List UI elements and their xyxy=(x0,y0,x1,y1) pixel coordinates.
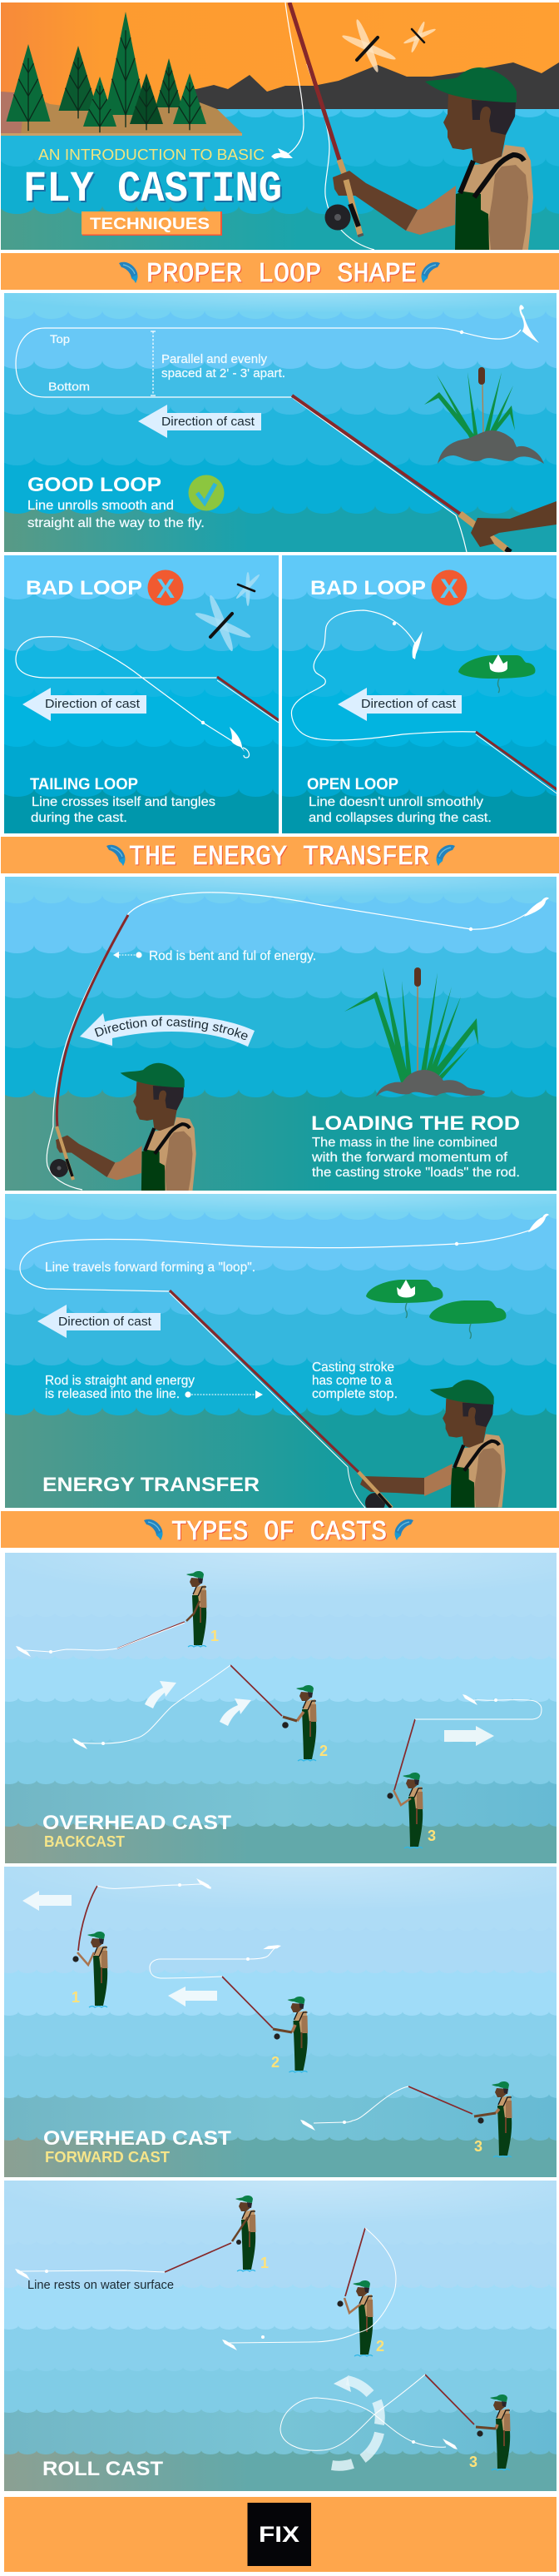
mountains xyxy=(186,62,559,111)
subheading: FORWARD CAST xyxy=(45,2149,170,2166)
casting line loop xyxy=(16,328,521,397)
icon: fish right xyxy=(422,262,440,283)
number 2: 2 xyxy=(319,1743,328,1759)
stop note xyxy=(312,1360,398,1401)
reeds xyxy=(344,967,478,1082)
direction arrow: Direction of cast xyxy=(161,415,255,429)
direction arrow: Direction of cast xyxy=(361,697,457,711)
heading: ENERGY TRANSFER xyxy=(42,1474,260,1496)
heading: BAD LOOP xyxy=(26,577,142,599)
rod xyxy=(217,677,279,723)
dragonfly large xyxy=(341,18,397,73)
arm xyxy=(424,1464,453,1496)
heading: LOADING THE ROD xyxy=(311,1112,520,1135)
direction arrow: Direction of cast xyxy=(45,697,141,711)
fly xyxy=(528,1214,549,1232)
rod note xyxy=(45,1374,195,1401)
fly xyxy=(413,631,423,659)
description xyxy=(311,1136,520,1180)
line dot xyxy=(455,1242,458,1246)
intro line: AN INTRODUCTION TO BASIC xyxy=(38,147,265,163)
fishing lines xyxy=(285,2,374,250)
lily pad with flower xyxy=(366,1280,443,1318)
icon: fish left xyxy=(119,262,137,283)
rod handle xyxy=(346,180,361,236)
heading: OVERHEAD CAST xyxy=(42,1812,231,1834)
number 1: 1 xyxy=(260,2255,269,2271)
figure 2 xyxy=(72,1665,316,1761)
line dot xyxy=(469,927,472,931)
water bands xyxy=(0,2181,559,2500)
figure 3 xyxy=(300,2081,512,2157)
heading: ROLL CAST xyxy=(42,2458,163,2480)
description: Line unrolls smooth and xyxy=(27,499,174,513)
figure 1 xyxy=(15,2196,256,2280)
fly xyxy=(519,305,539,343)
lily pad xyxy=(429,1300,507,1339)
spacing note xyxy=(161,352,285,380)
top label: Top xyxy=(50,332,70,346)
line dot xyxy=(393,622,396,625)
description: the casting stroke "loads" the rod. xyxy=(312,1166,520,1180)
water xyxy=(1,109,559,250)
description xyxy=(27,499,205,530)
dragonfly small xyxy=(235,572,261,606)
figure 1 xyxy=(16,1571,206,1657)
panel: loading the rod xyxy=(5,877,557,1191)
heading: THE ENERGY TRANSFER xyxy=(129,842,429,873)
fly xyxy=(271,148,293,159)
description: with the forward momentum of xyxy=(311,1151,508,1165)
water bands xyxy=(0,1194,559,1508)
figure 1 xyxy=(72,1878,211,2007)
dragonfly small xyxy=(403,21,437,53)
casting line xyxy=(127,893,527,929)
rod xyxy=(170,1290,392,1508)
loop note: Line travels forward forming a "loop". xyxy=(45,1261,255,1275)
rod xyxy=(292,395,511,552)
direction arrow xyxy=(138,405,261,438)
subheading: BACKCAST xyxy=(44,1833,125,1850)
rod grip xyxy=(339,160,347,182)
reel xyxy=(324,205,351,230)
direction arrow xyxy=(37,1305,161,1338)
number 1: 1 xyxy=(210,1628,219,1644)
figure 3 xyxy=(280,2375,511,2470)
dotted pointer xyxy=(185,1390,263,1399)
subheading: TAILING LOOP xyxy=(30,776,138,793)
panel: energy transfer xyxy=(0,1194,559,1513)
stop note: Casting stroke xyxy=(312,1360,394,1375)
line dot xyxy=(201,721,205,724)
main title: FLY CASTING xyxy=(23,165,282,214)
rock xyxy=(438,430,544,464)
island xyxy=(1,92,242,136)
icon: x: X xyxy=(440,574,459,604)
figure 2 xyxy=(222,2228,396,2356)
icon: fish left xyxy=(144,1519,162,1540)
panel: open loop xyxy=(0,555,559,851)
icon: fish right xyxy=(395,1519,413,1540)
banner: types of casts xyxy=(1,1511,559,1548)
techniques badge: TECHNIQUES xyxy=(90,216,210,233)
casting line xyxy=(20,1230,532,1291)
bottom label: Bottom xyxy=(48,380,90,393)
panel: roll cast xyxy=(0,2181,559,2500)
description: and collapses during the cast. xyxy=(309,811,492,825)
description: The mass in the line combined xyxy=(312,1136,497,1150)
heading: PROPER LOOP SHAPE xyxy=(146,259,417,290)
panel: overhead forward cast xyxy=(0,1867,559,2186)
number 3: 3 xyxy=(428,1828,436,1844)
line dot xyxy=(460,331,463,334)
arm xyxy=(333,171,456,235)
panel: tailing loop xyxy=(4,555,279,833)
description: during the cast. xyxy=(31,811,127,825)
line note: Line rests on water surface xyxy=(27,2279,174,2292)
hero panel xyxy=(0,2,559,268)
direction arrow xyxy=(338,688,462,721)
icon: x xyxy=(148,569,183,606)
water bands xyxy=(0,1553,559,1872)
fly xyxy=(230,727,245,752)
techniques badge xyxy=(82,211,222,236)
heading: OVERHEAD CAST xyxy=(43,2127,231,2150)
icon: x: X xyxy=(156,574,176,604)
heading: GOOD LOOP xyxy=(27,474,161,496)
water bands xyxy=(0,1867,559,2186)
rod note: is released into the line. xyxy=(45,1387,180,1401)
left arrow xyxy=(22,1891,72,1911)
water bands xyxy=(0,877,559,1191)
angler xyxy=(50,1063,196,1191)
spacing note: Parallel and evenly xyxy=(161,352,267,366)
spacing note: spaced at 2' - 3' apart. xyxy=(161,366,285,380)
logo xyxy=(248,2503,311,2566)
left arrow xyxy=(168,1987,217,2007)
panel: good loop xyxy=(0,293,559,568)
water bands xyxy=(0,555,559,851)
tailing line xyxy=(16,637,232,741)
footer xyxy=(4,2497,557,2572)
icon: check xyxy=(188,475,225,511)
right arrow xyxy=(444,1726,494,1746)
subheading: OPEN LOOP xyxy=(307,776,398,793)
number 3: 3 xyxy=(474,2138,482,2155)
description: Line crosses itself and tangles xyxy=(32,795,215,809)
hand xyxy=(471,501,557,547)
dimension marker xyxy=(151,331,156,395)
fly xyxy=(524,898,549,917)
stop note: complete stop. xyxy=(312,1387,398,1401)
angler xyxy=(289,2,533,250)
lift arrow xyxy=(145,1681,176,1708)
reeds xyxy=(424,367,515,440)
description: Line doesn't unroll smoothly xyxy=(309,795,483,809)
roll arrow ring xyxy=(332,2380,380,2466)
description xyxy=(31,795,215,825)
number 2: 2 xyxy=(376,2338,384,2355)
stop note: has come to a xyxy=(312,1374,392,1388)
figure 2 xyxy=(150,1939,308,2072)
panel: overhead backcast xyxy=(0,1553,559,1872)
heading: BAD LOOP xyxy=(310,577,426,599)
rod blank xyxy=(289,2,339,160)
direction arrow xyxy=(22,688,146,721)
angler xyxy=(365,1380,506,1513)
banner: the energy transfer xyxy=(1,837,559,873)
description: straight all the way to the fly. xyxy=(27,516,205,530)
description xyxy=(309,795,492,825)
island left tint xyxy=(1,92,22,133)
dragonfly large xyxy=(194,594,252,653)
rod handle xyxy=(57,1126,73,1180)
reel xyxy=(50,1159,68,1177)
icon: fish right xyxy=(437,845,455,866)
water bands xyxy=(4,555,279,833)
reel xyxy=(365,1493,385,1513)
curved arrow: Direction of casting stroke xyxy=(95,1017,248,1040)
icon: x xyxy=(431,569,467,606)
water bands xyxy=(0,293,559,568)
roll arrow head xyxy=(334,2376,351,2392)
number 2: 2 xyxy=(271,2054,280,2071)
lily pad xyxy=(458,654,536,693)
sky xyxy=(1,2,559,111)
trees xyxy=(7,12,206,132)
lift arrow xyxy=(220,1698,251,1726)
number 1: 1 xyxy=(72,1989,80,2006)
bent rod xyxy=(47,915,128,1190)
hook xyxy=(243,748,249,758)
icon: fish left xyxy=(106,845,125,866)
number 3: 3 xyxy=(469,2454,477,2470)
rod annotation: Rod is bent and ful of energy. xyxy=(149,949,316,963)
figure 3 xyxy=(387,1694,542,1848)
hand xyxy=(360,1476,424,1494)
open loop line xyxy=(292,610,476,740)
rock xyxy=(376,1070,485,1097)
rod note: Rod is straight and energy xyxy=(45,1374,195,1388)
direction arrow: Direction of cast xyxy=(58,1315,152,1329)
arm xyxy=(56,1136,142,1180)
heading: TYPES OF CASTS xyxy=(171,1517,387,1548)
logo: FIX xyxy=(259,2522,299,2547)
rod xyxy=(476,732,559,795)
banner: proper loop shape xyxy=(1,253,559,290)
island shore xyxy=(1,133,242,136)
